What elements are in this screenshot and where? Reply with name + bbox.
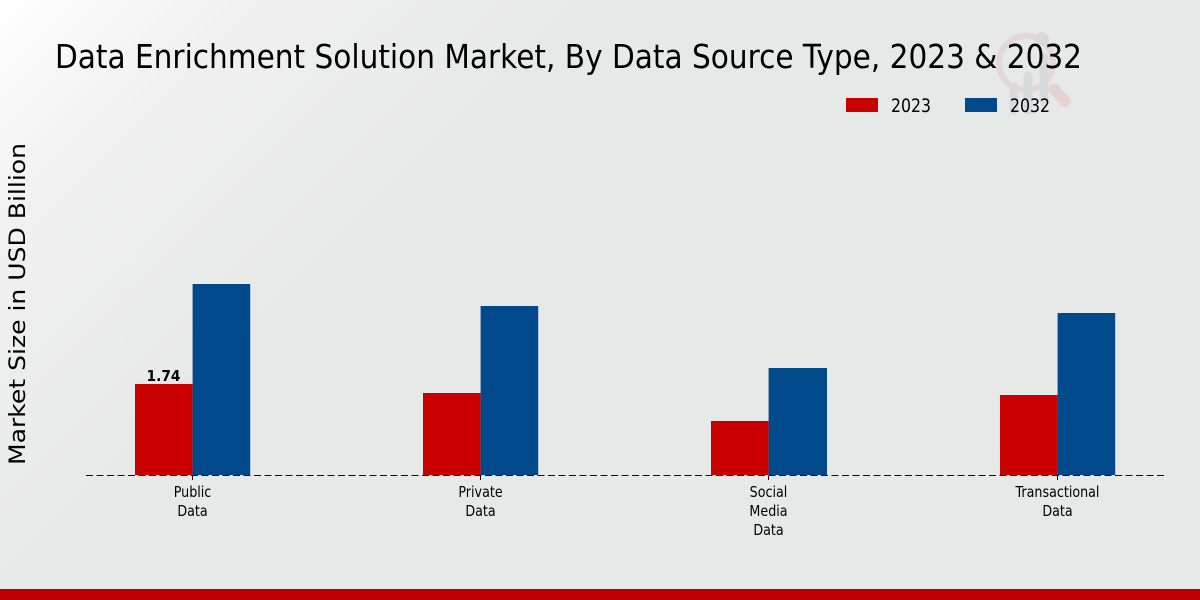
bar chart xyxy=(135,284,1115,475)
legend xyxy=(846,95,1050,117)
label: Public Data: Public xyxy=(174,484,211,501)
footer bar xyxy=(0,589,1200,600)
label: Private Data: Private xyxy=(458,484,503,501)
group: Private Data xyxy=(423,306,538,475)
x axis labels xyxy=(174,484,1099,539)
label: Public Data: Data xyxy=(177,503,208,520)
label: Social Media Data: Media xyxy=(749,503,788,520)
legend swatch: 2032 xyxy=(965,98,997,112)
value label: 1.74 xyxy=(146,367,181,385)
x axis baseline xyxy=(86,474,1164,476)
group: Transactional Data xyxy=(1000,313,1115,475)
label: Private Data: Data xyxy=(465,503,496,520)
legend label: 2032: 2032 xyxy=(1010,95,1050,117)
watermark logo xyxy=(999,32,1065,110)
legend label: 2023: 2023 xyxy=(891,95,931,117)
label: Transactional Data: Transactional xyxy=(1016,484,1099,501)
label: Social Media Data: Social xyxy=(750,484,787,501)
group: Public Data xyxy=(135,284,250,475)
group: Social Media Data xyxy=(711,368,827,475)
y axis title: Market Size in USD Billion xyxy=(5,143,31,465)
label: Transactional Data: Data xyxy=(1042,503,1073,520)
label: Social Media Data: Data xyxy=(753,522,784,539)
legend swatch: 2023 xyxy=(846,98,878,112)
title: Data Enrichment Solution Market, By Data Source Type, 2023 & 2032 xyxy=(55,37,1082,76)
